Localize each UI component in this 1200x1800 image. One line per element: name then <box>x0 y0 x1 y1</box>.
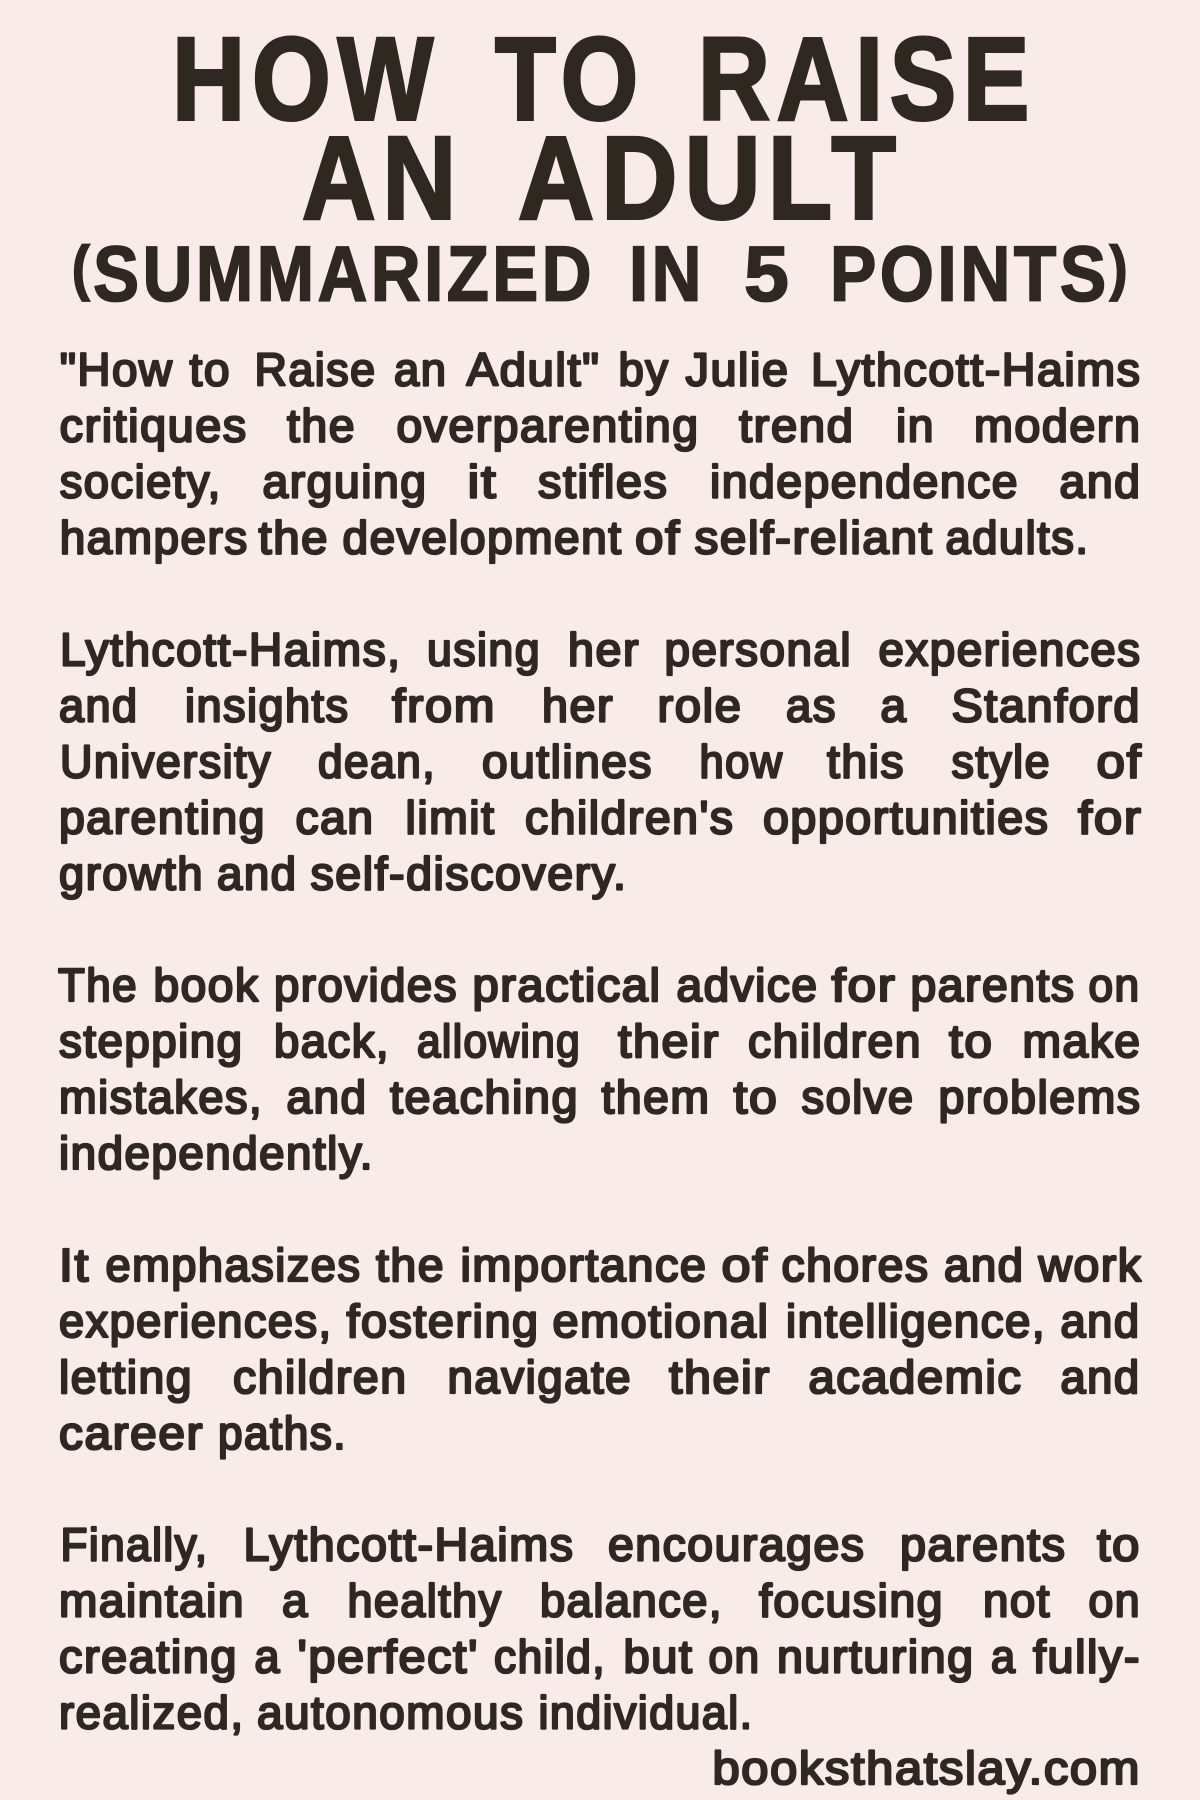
paragraph 1: arguing <box>262 456 428 508</box>
paragraph 4: career <box>59 1407 204 1459</box>
paragraph 5: Finally, <box>60 1519 208 1571</box>
paragraph 2: children's <box>525 791 734 843</box>
paragraph 5: realized, <box>59 1686 244 1738</box>
paragraph 4: importance <box>460 1239 708 1291</box>
paragraph 1: it <box>468 456 498 508</box>
paragraph 5: 'perfect' <box>298 1631 479 1683</box>
paragraph 1: "How <box>60 344 174 396</box>
paragraph 2: from <box>392 679 496 731</box>
paragraph 2: growth <box>59 847 204 899</box>
paragraph 3: mistakes, <box>59 1071 263 1123</box>
paragraph 5: nurturing <box>777 1631 974 1683</box>
paragraph 2: limit <box>406 791 496 843</box>
paragraph 4: intelligence, <box>786 1295 1046 1347</box>
paragraph 5: Lythcott-Haims <box>244 1519 574 1571</box>
paragraph 3: independently. <box>59 1127 374 1179</box>
paragraph 1: to <box>190 344 231 396</box>
paragraph 5: autonomous <box>257 1686 524 1738</box>
paragraph 3: practical <box>472 959 662 1011</box>
paragraph 4: letting <box>59 1351 193 1403</box>
paragraph 1: critiques <box>60 400 248 452</box>
paragraph 1: the <box>258 512 329 564</box>
paragraph 3: The <box>58 959 138 1011</box>
paragraph 1: modern <box>974 400 1142 452</box>
paragraph 2: opportunities <box>763 791 1050 843</box>
paragraph 3: their <box>618 1015 720 1067</box>
paragraph 1: development <box>342 512 622 564</box>
paragraph 5: on <box>708 1631 760 1683</box>
subtitle <box>72 230 1131 318</box>
title: HOW <box>172 14 440 146</box>
title <box>172 14 1036 244</box>
paragraph 5: not <box>983 1575 1051 1627</box>
paragraph 1: the <box>287 400 356 452</box>
paragraph 3: solve <box>802 1071 914 1123</box>
paragraph 1: Lythcott-Haims <box>811 344 1142 396</box>
paragraph 5: fully- <box>1033 1631 1141 1683</box>
paragraph 3: to <box>734 1071 778 1123</box>
paragraph 5: child, <box>494 1631 606 1683</box>
paragraph 4: It <box>59 1239 90 1291</box>
paragraph 4: academic <box>808 1351 1022 1403</box>
paragraph 3 <box>58 959 1142 1179</box>
paragraph 2: her <box>542 679 614 731</box>
paragraph 4: of <box>722 1239 768 1291</box>
paragraph 5 <box>59 1519 1141 1738</box>
paragraph 1: self-reliant <box>694 512 934 564</box>
paragraph 2: Stanford <box>952 679 1141 731</box>
paragraph 3: to <box>949 1015 994 1067</box>
paragraph 4: paths. <box>218 1407 347 1459</box>
subtitle: ( <box>72 234 93 302</box>
paragraph 1: by <box>618 344 670 396</box>
paragraph 1: in <box>896 400 935 452</box>
paragraph 4: emphasizes <box>106 1239 362 1291</box>
paragraph 1: an <box>394 344 447 396</box>
subtitle: ) <box>1110 234 1131 302</box>
paragraph 3: problems <box>938 1071 1142 1123</box>
paragraph 4: their <box>669 1351 771 1403</box>
paragraph 3: teaching <box>390 1071 579 1123</box>
subtitle: IN <box>629 230 705 318</box>
paragraph 1: Julie <box>686 344 790 396</box>
paragraph 2: parenting <box>59 791 266 843</box>
paragraph 2: a <box>880 679 908 731</box>
paragraph 2: self-discovery. <box>310 847 628 899</box>
paragraph 1: independence <box>710 456 1019 508</box>
paragraph 5: maintain <box>59 1575 245 1627</box>
paragraph 2: and <box>217 847 298 899</box>
subtitle: SUMMARIZED <box>93 230 595 318</box>
subtitle: POINTS <box>830 230 1144 318</box>
paragraph 1: of <box>635 512 681 564</box>
paragraph 5: encourages <box>608 1519 866 1571</box>
paragraph 3: provides <box>274 959 458 1011</box>
paragraph 3: back, <box>274 1015 390 1067</box>
paragraph 2: role <box>658 679 742 731</box>
paragraph 3: advice <box>676 959 818 1011</box>
paragraph 4: experiences, <box>59 1295 332 1347</box>
paragraph 4: and <box>944 1239 1024 1291</box>
paragraph 5: on <box>1088 1575 1141 1627</box>
paragraph 3: children <box>748 1015 922 1067</box>
paragraph 4: and <box>1060 1295 1140 1347</box>
paragraph 2: experiences <box>878 624 1142 676</box>
paragraph 4: the <box>376 1239 445 1291</box>
paragraph 2: as <box>786 679 837 731</box>
paragraph 3: parents <box>910 959 1076 1011</box>
title: ADULT <box>518 112 903 244</box>
paragraph 5: healthy <box>348 1575 502 1627</box>
title: TO <box>495 14 645 146</box>
paragraph 2: her <box>568 624 640 676</box>
title: AN <box>302 112 463 244</box>
website credit: booksthatslay.com <box>712 1742 1141 1794</box>
paragraph 3: book <box>154 959 260 1011</box>
paragraph 2: outlines <box>482 735 653 787</box>
paragraph 5: but <box>624 1631 694 1683</box>
paragraph 1: Adult" <box>466 344 600 396</box>
paragraph 4: and <box>1060 1351 1140 1403</box>
paragraph 3: allowing <box>417 1015 581 1067</box>
paragraph 5: to <box>1097 1519 1141 1571</box>
paragraph 4: work <box>1037 1239 1142 1291</box>
paragraph 2: how <box>700 735 784 787</box>
paragraph 2: personal <box>664 624 852 676</box>
paragraph 5: a <box>282 1575 309 1627</box>
paragraph 5: balance, <box>540 1575 723 1627</box>
paragraph 5: a <box>254 1631 281 1683</box>
paragraph 4: emotional <box>552 1295 770 1347</box>
paragraph 1: society, <box>60 456 222 508</box>
paragraph 3: them <box>602 1071 710 1123</box>
paragraph 2: this <box>827 735 905 787</box>
paragraph 3: for <box>832 959 896 1011</box>
paragraph 3: and <box>286 1071 368 1123</box>
title: RAISE <box>698 14 1036 146</box>
paragraph 5: creating <box>59 1631 238 1683</box>
paragraph 5: individual. <box>538 1686 754 1738</box>
paragraph 2: style <box>952 735 1051 787</box>
paragraph 2 <box>59 624 1142 899</box>
paragraph 2: dean, <box>318 735 436 787</box>
paragraph 4 <box>59 1239 1142 1459</box>
paragraph 1: stifles <box>538 456 668 508</box>
paragraph 3: on <box>1088 959 1140 1011</box>
paragraph 2: University <box>60 735 272 787</box>
paragraph 1: trend <box>739 400 854 452</box>
paragraph 4: fostering <box>346 1295 540 1347</box>
paragraph 4: navigate <box>448 1351 632 1403</box>
paragraph 2: Lythcott-Haims, <box>60 624 402 676</box>
paragraph 2: can <box>296 791 374 843</box>
paragraph 4: chores <box>782 1239 930 1291</box>
paragraph 2: for <box>1078 791 1142 843</box>
paragraph 1: hampers <box>60 512 249 564</box>
paragraph 5: focusing <box>759 1575 944 1627</box>
paragraph 2: of <box>1096 735 1142 787</box>
paragraph 2: using <box>427 624 541 676</box>
paragraph 3: make <box>1022 1015 1142 1067</box>
paragraph 1: and <box>1060 456 1142 508</box>
paragraph 5: parents <box>900 1519 1066 1571</box>
paragraph 1: adults. <box>946 512 1090 564</box>
paragraph 1 <box>60 344 1142 564</box>
paragraph 2: and <box>59 679 138 731</box>
paragraph 3: stepping <box>59 1015 244 1067</box>
subtitle: 5 <box>744 230 793 318</box>
paragraph 4: children <box>233 1351 408 1403</box>
paragraph 1: Raise <box>254 344 376 396</box>
paragraph 5: a <box>991 1631 1016 1683</box>
paragraph 2: insights <box>185 679 350 731</box>
paragraph 1: overparenting <box>396 400 700 452</box>
